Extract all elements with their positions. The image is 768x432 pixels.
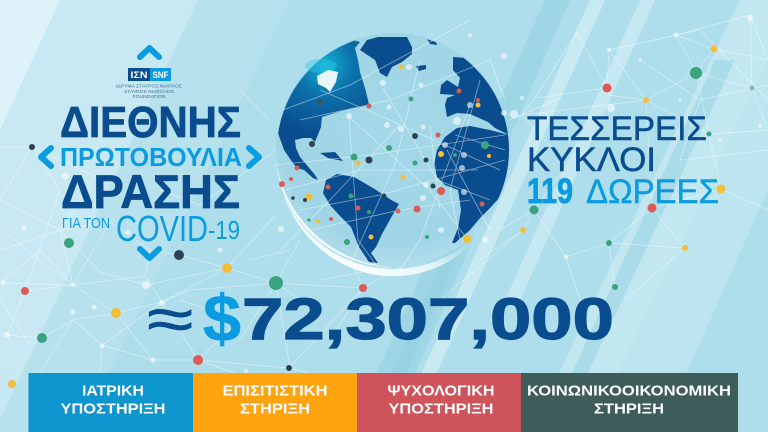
heading line 2: ΠΡΩΤΟΒΟΥΛΙΑ — [60, 142, 242, 172]
globe lines — [275, 20, 505, 270]
subheading COVID: COVID — [116, 208, 208, 249]
icon: chevron down — [140, 249, 159, 258]
dollar sign: $ — [203, 281, 241, 355]
number: 119: 119 — [527, 172, 573, 211]
globe coloured dots — [279, 64, 491, 245]
bar: socioeconomic support — [521, 373, 738, 432]
bar: medical support: ΙΑΤΡΙΚΗ — [82, 382, 144, 400]
bar: socioeconomic support: ΣΤΗΡΙΞΗ — [594, 400, 664, 418]
icon: chevron left — [41, 148, 51, 166]
line: cycles: ΚΥΚΛΟΙ — [527, 141, 656, 179]
icon: chevron up — [140, 48, 159, 57]
globe nodes — [278, 33, 507, 243]
bar: psychological support — [357, 373, 521, 432]
icon: chevron right — [249, 148, 259, 166]
total amount — [147, 281, 614, 355]
right text block — [527, 110, 719, 211]
line: four: ΤΕΣΣΕΡΕΙΣ — [527, 110, 707, 148]
subheading 19: -19 — [208, 215, 240, 245]
title block — [41, 48, 259, 258]
approx sign: ≈ — [147, 285, 193, 354]
logo: FOUNDATION — [132, 94, 166, 99]
bar: medical support: ΥΠΟΣΤΗΡΙΞΗ — [60, 400, 166, 418]
bar: psychological support: ΨΥΧΟΛΟΓΙΚΗ — [388, 382, 494, 400]
bar: psychological support: ΥΠΟΣΤΗΡΙΞΗ — [388, 400, 494, 418]
bar: food support: ΣΤΗΡΙΞΗ — [240, 400, 310, 418]
category bars — [28, 373, 738, 432]
bar: food support — [193, 373, 357, 432]
logo: SNF — [152, 70, 169, 80]
bar: medical support — [28, 373, 193, 432]
globe lower shine — [276, 160, 393, 267]
logo — [116, 68, 182, 99]
line: donations: ΔΩΡΕΕΣ — [586, 173, 719, 211]
logo: ΙΣΝ — [130, 70, 148, 80]
globe — [275, 20, 510, 276]
coloured network dots — [8, 46, 754, 388]
logo: STAVROS NIARCHOS — [124, 89, 174, 94]
subheading small: ΓΙΑ ΤΟΝ — [62, 215, 110, 232]
bar: food support: ΕΠΙΣΙΤΙΣΤΙΚΗ — [222, 382, 328, 400]
polar white land — [317, 70, 338, 92]
globe polar glow — [305, 59, 337, 73]
amount: 72,307,000 — [242, 287, 614, 352]
logo: ΙΔΡΥΜΑ ΣΤΑΥΡΟΣ ΝΙΑΡΧΟΣ — [116, 84, 182, 88]
heading line 1: ΔΙΕΘΝΗΣ — [60, 98, 241, 147]
globe rim highlight — [277, 160, 510, 276]
heading line 3: ΔΡΑΣΗΣ — [61, 165, 240, 218]
bar: socioeconomic support: ΚΟΙΝΩΝΙΚΟΟΙΚΟΝΟΜΙΚΗ — [527, 382, 731, 400]
continents — [276, 37, 510, 263]
